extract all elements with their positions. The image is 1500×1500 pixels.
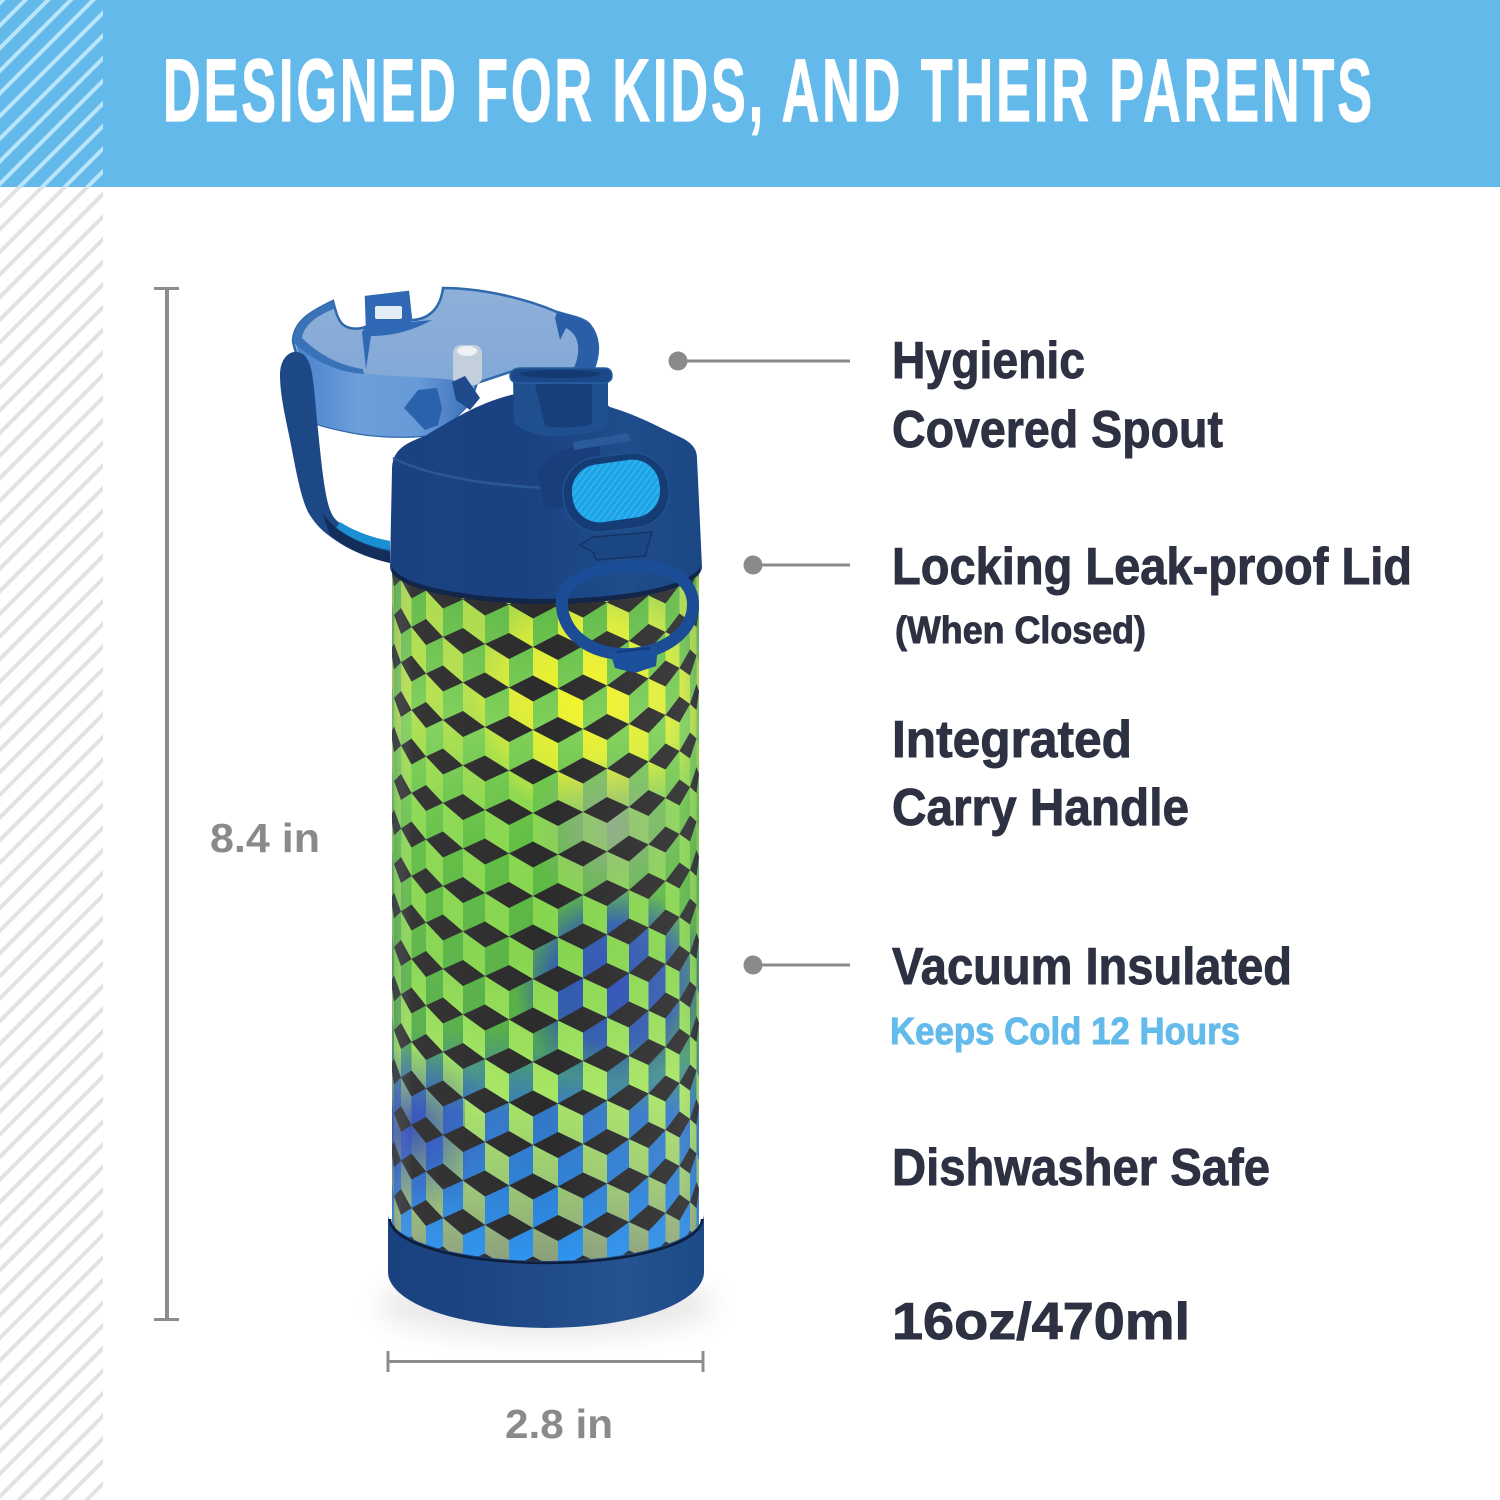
ground shadow (376, 1273, 716, 1337)
pull ring (562, 566, 693, 673)
height dimension line (154, 287, 179, 1321)
blue on left edge faces (392, 1050, 465, 1207)
feature: hygienic covered spout: Hygienic (892, 332, 1085, 390)
bottle body with cube pattern (392, 572, 699, 1261)
left faces (385, 570, 705, 1270)
cap interior (293, 288, 598, 437)
button housing (537, 433, 673, 536)
yellow glow on left faces (478, 601, 699, 812)
black diamonds (392, 573, 699, 1261)
feature: integrated carry handle: Carry Handle (892, 779, 1189, 837)
width dimension line (386, 1351, 704, 1372)
header hatch corner (0, 0, 103, 187)
callout: lid (744, 556, 850, 574)
callout: spout (668, 352, 850, 370)
feature: locking leak-proof lid: (When Closed) (895, 610, 1146, 652)
straw (453, 345, 482, 385)
gray on left faces (546, 762, 673, 890)
feature: integrated carry handle (892, 711, 1189, 837)
feature: capacity: 16oz/470ml (892, 1293, 1190, 1351)
cap rim (293, 301, 364, 374)
header band (0, 0, 1500, 187)
shoulder crease (393, 458, 545, 488)
gray patch (544, 762, 680, 897)
hatched side strip (0, 187, 103, 1500)
bottle (280, 288, 716, 1337)
carry handle (280, 352, 390, 563)
height label: 8.4 in (210, 815, 320, 861)
feature: dishwasher safe: Dishwasher Safe (892, 1139, 1270, 1197)
feature: vacuum insulated: Vacuum Insulated (892, 938, 1292, 996)
right faces (385, 570, 705, 1270)
feature: vacuum insulated (890, 938, 1292, 1053)
spout (510, 368, 612, 437)
cap side hinge (555, 312, 598, 372)
feature: locking leak-proof lid (892, 538, 1412, 652)
feature: vacuum insulated: Keeps Cold 12 Hours (890, 1011, 1240, 1053)
blue patch left (392, 1054, 480, 1202)
clip tab (362, 292, 432, 369)
callout: insulation (744, 956, 850, 974)
lid shell (390, 394, 702, 603)
feature: hygienic covered spout (892, 332, 1223, 459)
hinge (580, 532, 652, 560)
width label: 2.8 in (505, 1401, 613, 1447)
feature: locking leak-proof lid: Locking Leak-proof Lid (892, 538, 1412, 596)
cylinder shading (385, 570, 705, 1270)
base boot (388, 1214, 704, 1328)
release button (568, 456, 664, 526)
flip cap (293, 288, 598, 437)
lid (390, 368, 702, 673)
cap hinge (404, 376, 480, 430)
blue patch right (518, 890, 699, 1079)
feature: hygienic covered spout: Covered Spout (892, 401, 1223, 459)
feature: integrated carry handle: Integrated (892, 711, 1132, 769)
cap front wall (296, 342, 470, 437)
